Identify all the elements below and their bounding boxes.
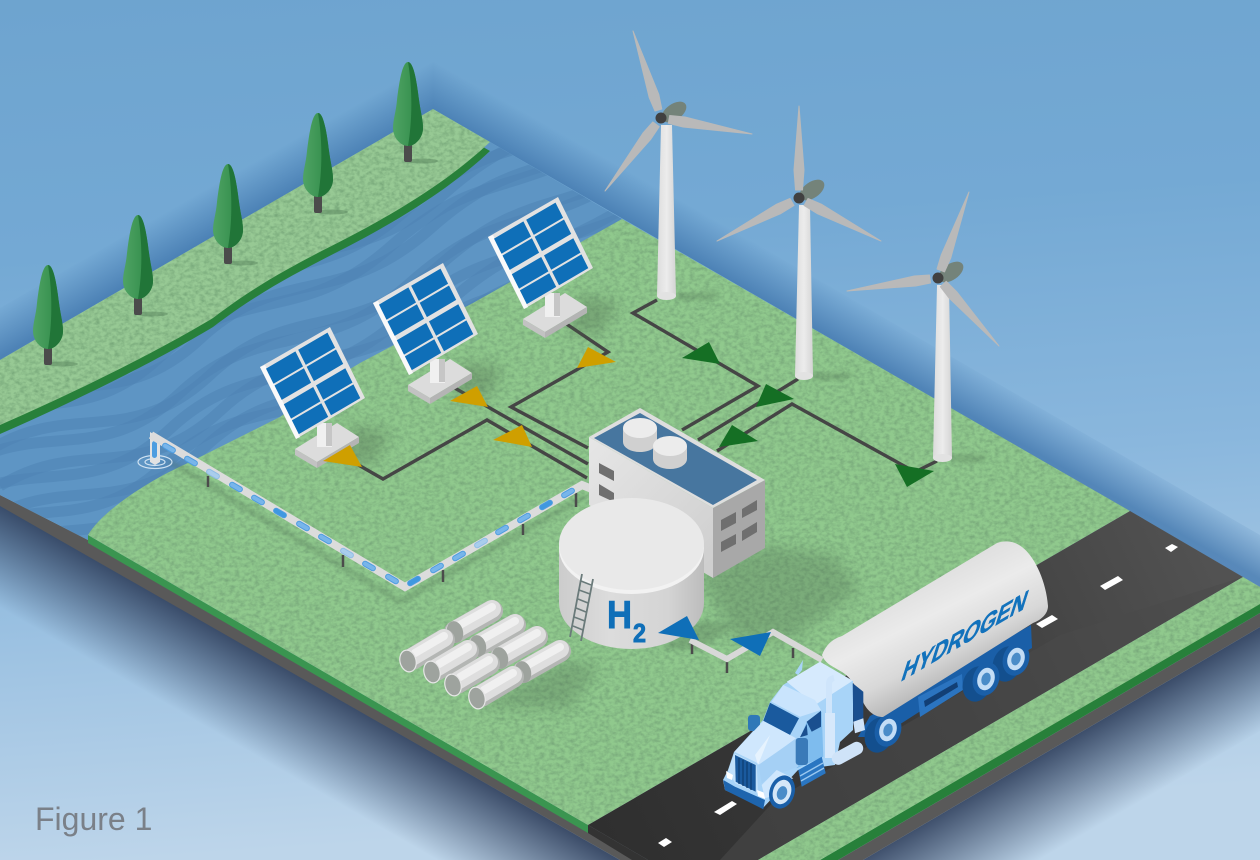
grille (735, 755, 756, 792)
trees on far bank (33, 62, 438, 366)
windows (599, 463, 757, 552)
ground shadows (170, 293, 990, 708)
fuel tank (838, 748, 857, 758)
fender (762, 770, 793, 798)
hood side (758, 738, 798, 783)
H2 label (607, 594, 646, 648)
grille surround (728, 753, 758, 793)
road dashes (658, 544, 1178, 847)
back row (455, 607, 560, 672)
solar panel 3 (488, 197, 618, 338)
power cables from wind turbines (633, 300, 937, 472)
hydrogen flow arrows (658, 616, 771, 656)
front row (412, 636, 513, 696)
left wall (589, 437, 713, 578)
side windows (807, 711, 821, 732)
figure caption: Figure 1 (35, 801, 152, 837)
trailer tank (822, 541, 1048, 717)
H2 label: 2 (633, 618, 646, 648)
water intake pipe (138, 432, 592, 587)
sleeper roof (787, 662, 853, 705)
solar flow arrows (323, 347, 616, 467)
pipe supports (208, 476, 576, 582)
right wall (713, 480, 765, 578)
rooftop tank 1 (623, 418, 657, 452)
bumper (723, 780, 765, 809)
far river bank island (0, 109, 490, 434)
solar panel 2 (373, 263, 503, 404)
roof (589, 408, 765, 508)
steps (798, 757, 826, 787)
rooftop tank 2 (653, 436, 687, 469)
trailer side box (918, 674, 963, 717)
exhaust stack (829, 678, 834, 757)
main land (88, 219, 1130, 833)
wind turbine 2 (717, 106, 881, 380)
hydrogen pipe to truck (690, 632, 822, 673)
truck cab (723, 660, 865, 809)
cab visor (772, 685, 821, 717)
wind turbine 1 (605, 31, 752, 300)
hydrogen storage tank (559, 498, 704, 649)
solar panel 1 (260, 327, 390, 468)
intake ripple (138, 456, 172, 468)
water capsules (162, 442, 575, 587)
wind flow arrows (682, 342, 934, 487)
cab back (853, 683, 863, 725)
platform side edge (0, 495, 1260, 860)
river (0, 142, 622, 540)
front wheel (765, 772, 799, 812)
trailer chassis (858, 625, 1032, 737)
electrolyzer building (589, 408, 765, 578)
hood top (734, 721, 796, 765)
power cables from solar panels (355, 323, 608, 479)
road (588, 511, 1243, 860)
H2 label: H (607, 594, 632, 637)
door (797, 712, 823, 768)
road side grass strip (758, 577, 1260, 860)
left air cleaner (748, 715, 760, 731)
headlights (726, 771, 733, 780)
rear wheels (860, 639, 1034, 756)
hydrogen tanker truck (723, 541, 1048, 812)
stored hydrogen cylinders (397, 607, 560, 711)
wind turbine 3 (847, 192, 999, 462)
HYDROGEN lettering: HYDROGEN (898, 584, 1032, 689)
tank ladder (570, 574, 593, 641)
windshield (763, 703, 799, 735)
cab silhouette (723, 662, 853, 808)
air filter (796, 738, 808, 765)
rear mirror (795, 660, 803, 675)
